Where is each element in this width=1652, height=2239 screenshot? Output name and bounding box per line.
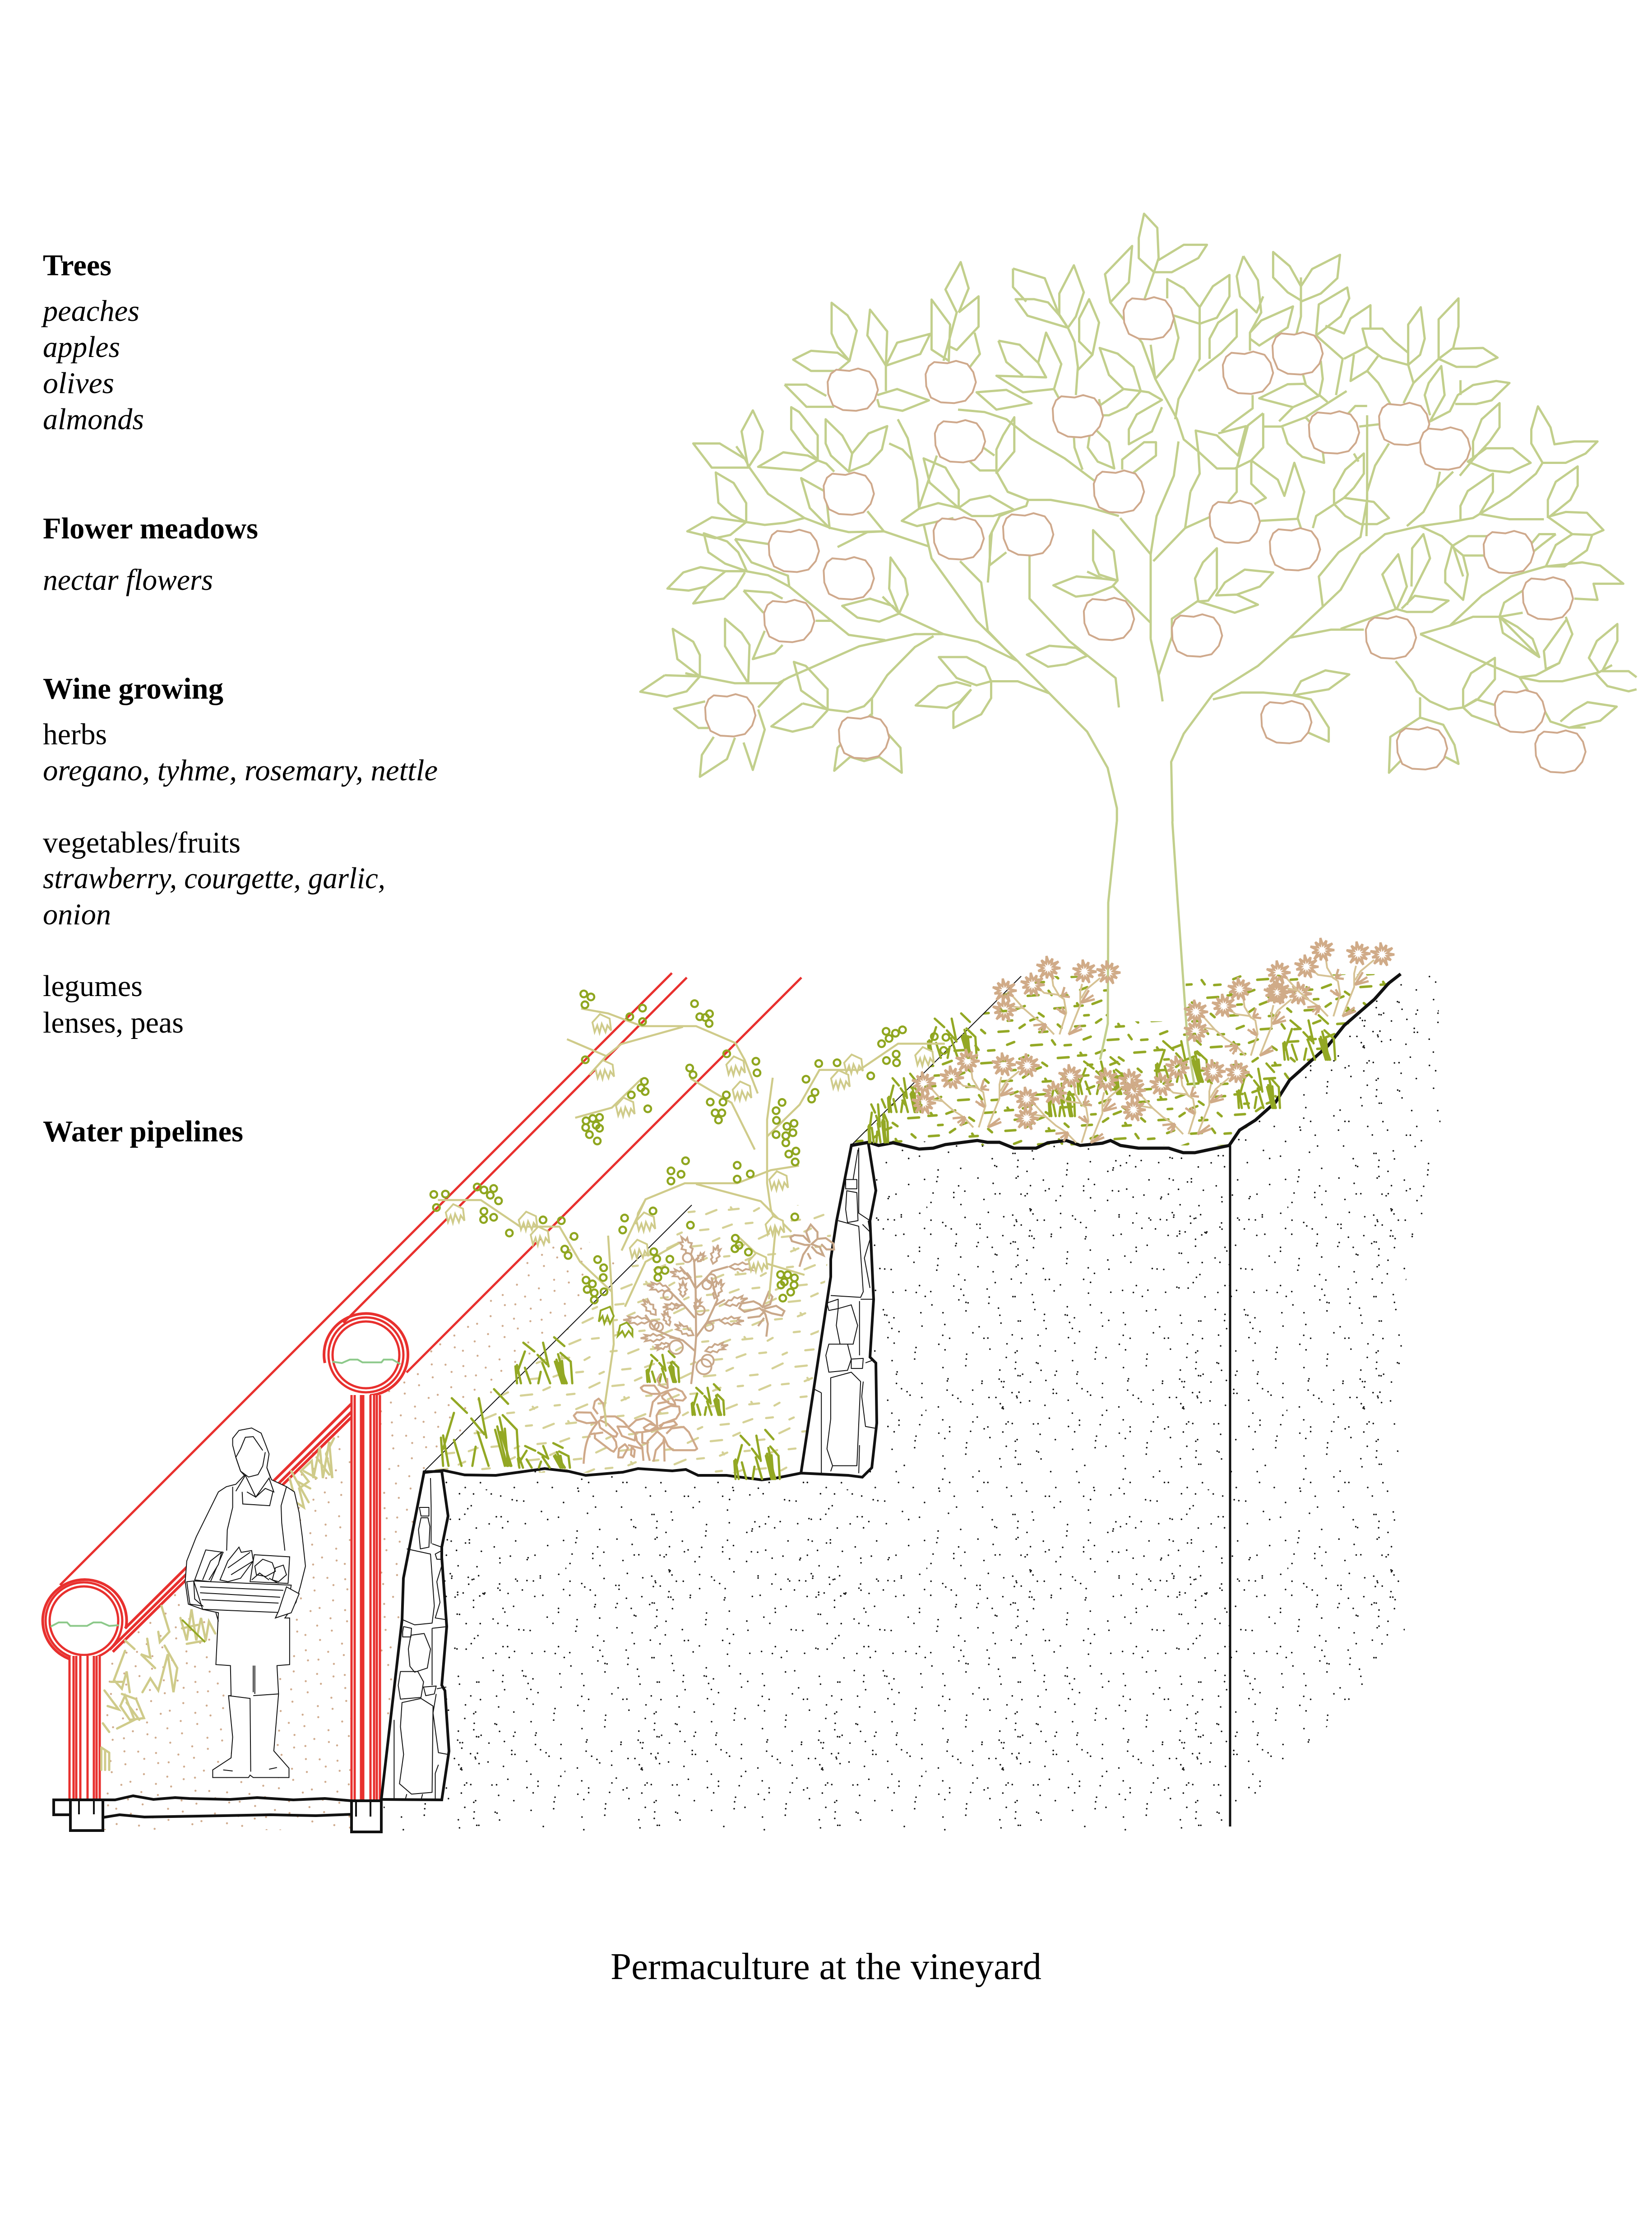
water level lines: [51, 1359, 400, 1627]
vine stems: [438, 1009, 945, 1427]
left support post: [69, 1656, 100, 1800]
nettle sprig: [791, 1224, 834, 1267]
fruit tree: [640, 214, 1637, 821]
text: vegetables and fruits: strawberry, courgette, garlic,: [43, 862, 385, 895]
figure: woman holding a crate of vegetables: [185, 1428, 305, 1778]
list: tree species: apples: [43, 330, 120, 364]
leaves: [623, 1234, 758, 1355]
caption: Permaculture at the vineyard: [611, 1946, 1041, 1988]
stems: [645, 1255, 728, 1384]
legend text block: [41, 249, 438, 1148]
text: herbs: [43, 718, 438, 787]
stones: [394, 1478, 448, 1800]
heading: trees: Trees: [43, 249, 111, 282]
grape clusters: [430, 991, 949, 1303]
vertical section line: [1229, 1145, 1231, 1826]
branches and leaves: [665, 410, 1542, 821]
heading: wine growing: Wine growing: [43, 672, 223, 705]
brown stipple under the pipes: [103, 1228, 619, 1830]
water pipelines: [43, 973, 801, 1801]
lower terrace ground cover: [423, 1205, 835, 1473]
soil stipple: [361, 948, 1467, 1850]
basil plant at the foot of the terrace: [574, 1374, 697, 1464]
tree trunk: [1100, 821, 1195, 1088]
text: vegetables and fruits: [43, 826, 385, 931]
thin slope lines: [423, 976, 1021, 1473]
upper pipe lines: [60, 973, 801, 1585]
wall outline: [381, 1471, 449, 1800]
list: tree species: almonds: [43, 403, 144, 436]
fruits: [650, 1253, 716, 1374]
footing left: [70, 1800, 103, 1831]
lower terrace ground line: [423, 1469, 801, 1480]
left pipe ring: [43, 1580, 127, 1661]
ground base lines and footings: [54, 1796, 381, 1832]
text: legumes: lenses, peas: [43, 1006, 184, 1039]
vine leaves: [446, 1014, 934, 1271]
upper terrace ground line: [851, 974, 1401, 1153]
flower meadow plants: [912, 938, 1394, 1143]
collar and apron: [216, 1475, 287, 1772]
face and hair: [236, 1437, 271, 1478]
text: herbs: oregano, tyhme, rosemary, nettle: [43, 754, 438, 787]
lower double pipe: [110, 1404, 352, 1652]
text: herbs: herbs: [43, 718, 107, 751]
grape vines: [430, 991, 949, 1427]
text: vegetables and fruits: vegetables/fruits: [43, 826, 241, 859]
darker leaves: [599, 1307, 633, 1337]
herb plant: tomato-like shrub: [623, 1224, 834, 1384]
second sprig: [739, 1292, 784, 1337]
right support post: [352, 1395, 380, 1801]
stones: [814, 1148, 875, 1473]
heading: water pipelines: Water pipelines: [43, 1115, 243, 1148]
clear space inside the trunk: [1108, 948, 1187, 1021]
upper terrace ground cover: [851, 974, 1401, 1145]
heading: flower meadows: Flower meadows: [43, 512, 258, 545]
list: tree species: olives: [43, 366, 114, 400]
text: vegetables and fruits: onion: [43, 898, 111, 931]
footing right: [352, 1801, 381, 1832]
lower stone wall: [381, 1471, 449, 1800]
grass tufts on terraces: [441, 1013, 1335, 1479]
right pipe ring: [324, 1313, 408, 1395]
stub and ground surface: [54, 1796, 352, 1817]
text: legumes: legumes: [43, 969, 143, 1003]
list: tree species: [41, 294, 144, 436]
text: nectar flowers: nectar flowers: [43, 563, 213, 597]
wall outline: [801, 1142, 877, 1477]
dark grass blade: [182, 1620, 205, 1642]
crate and produce: [187, 1547, 299, 1618]
upper stone wall: [801, 1142, 877, 1477]
list: tree species: peaches: [41, 294, 139, 328]
apples: [705, 297, 1586, 773]
pale grass along the pipe: [101, 1438, 334, 1770]
text: legumes: [43, 969, 184, 1039]
body silhouette: [185, 1428, 305, 1778]
